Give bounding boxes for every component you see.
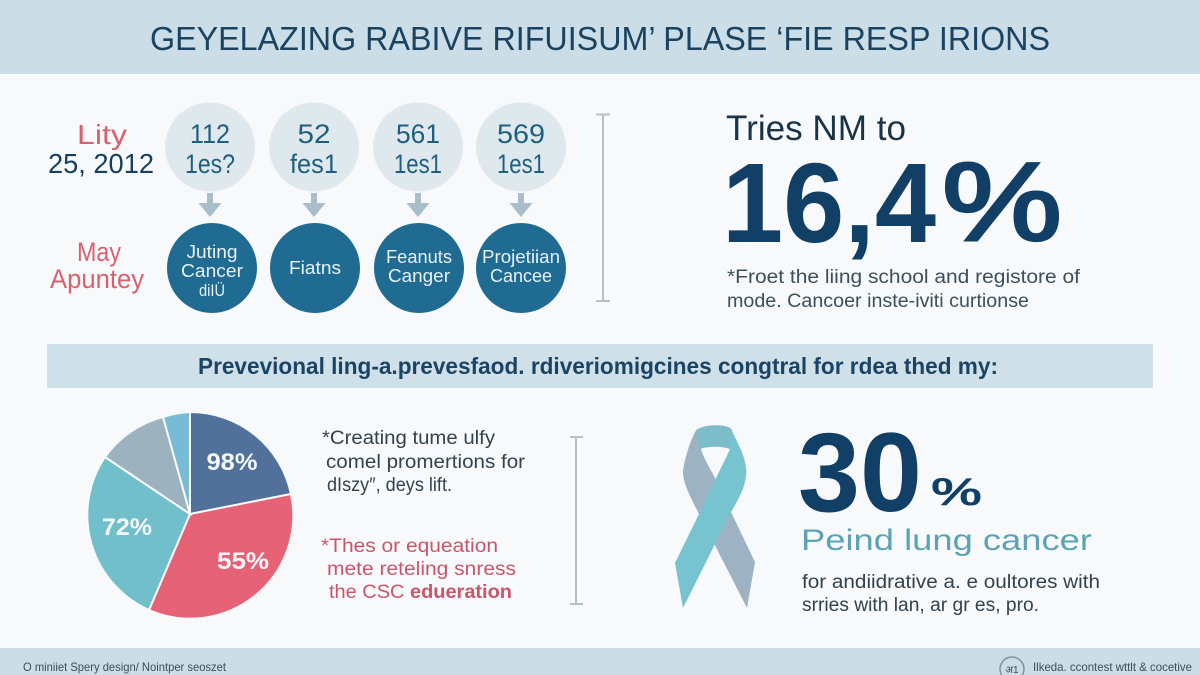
description — [802, 572, 1100, 616]
big number: 16,4 — [722, 140, 936, 266]
stat lead-in: Tries NM to — [726, 109, 906, 148]
row label: May Apuntey: May — [77, 237, 121, 267]
stat circle 3: 1es1 — [394, 149, 442, 179]
pie chart — [87, 412, 293, 619]
footer note: O miniiet Spery design/ Nointper seoszet — [23, 660, 227, 674]
footer icon — [1000, 657, 1024, 675]
pie labels — [102, 449, 269, 575]
stat circle 4 — [476, 102, 566, 192]
text block: dark note: *Creating tume ulfy — [322, 428, 496, 449]
footer bar — [0, 648, 1200, 675]
slice: grey — [105, 417, 190, 514]
cancer circle 4: Projetiian — [482, 247, 560, 267]
cancer circle 2: Fiatns — [289, 258, 341, 278]
cancer circle 1: diIÜ — [199, 281, 225, 300]
cancer circle 1 — [167, 223, 257, 313]
footer credit: Ilkeda. ccontest wttlt & cocetive — [1033, 660, 1192, 674]
stat note: *Froet the liing school and registore of — [727, 267, 1081, 288]
pie labels: 98% — [206, 449, 258, 476]
stat circle 1 — [165, 102, 255, 192]
stat circle 1: 1es? — [185, 149, 235, 179]
cancer circle 4: Cancee — [490, 266, 552, 286]
stat circle 2: 52 — [298, 119, 330, 149]
text block: red note: *Thes or equeation — [321, 536, 498, 557]
stat note: mode. Cancoer inste-iviti curtionse — [727, 291, 1029, 312]
arrow 3 — [406, 193, 430, 217]
text block: dark note: dIszy″, deys lift. — [327, 475, 452, 496]
stat circle 3: 561 — [396, 119, 440, 149]
row label: May Apuntey — [50, 237, 144, 294]
cancer circle 3 — [374, 223, 464, 313]
cancer circle 2 — [270, 223, 360, 313]
text block: dark note — [322, 428, 526, 496]
subheading: Peind lung cancer — [801, 524, 1092, 557]
big number: % — [942, 140, 1062, 264]
stat circle 3 — [373, 102, 463, 192]
percent sign: % — [931, 471, 982, 514]
big number — [722, 140, 1062, 266]
cancer circle 3: Canger — [388, 266, 450, 286]
icon: awareness ribbon — [675, 425, 755, 608]
description: for andiidrative a. e oultores with — [802, 572, 1100, 593]
slice: 55% — [149, 494, 293, 619]
cancer circle 4 — [476, 223, 566, 313]
panel: 30% statistic — [798, 410, 1100, 616]
stat circle 2 — [269, 102, 359, 192]
slice: light blue — [163, 412, 190, 514]
section banner: Prevevional ling-a.prevesfaod. rdiveriomigcines congtral for rdea thed my: — [198, 353, 998, 379]
panel: timeline circles — [48, 102, 566, 313]
text block: dark note: comel promertions for — [326, 452, 526, 473]
text block: red note — [321, 536, 516, 603]
row label: May Apuntey: Apuntey — [50, 264, 144, 294]
cancer circle 1: Juting — [186, 242, 238, 262]
stat circle 4: 1es1 — [497, 149, 545, 179]
row label: Lity 25, 2012 — [48, 119, 154, 179]
stat note — [727, 267, 1081, 312]
arrow 1 — [198, 193, 222, 217]
text block: red note: mete reteling snress — [327, 559, 516, 580]
panel: headline statistic — [722, 109, 1081, 312]
description: srries with lan, ar gr es, pro. — [802, 595, 1039, 616]
text block: red note: the CSC edueration — [329, 582, 512, 603]
row label: Lity 25, 2012: Lity — [77, 119, 127, 150]
pie labels: 55% — [217, 548, 269, 575]
stat circle 4: 569 — [497, 119, 545, 149]
cancer circle 3: Feanuts — [386, 247, 452, 267]
stat circle 1: 112 — [190, 119, 230, 149]
slice: 72% — [87, 457, 190, 610]
title banner: GEYELAZING RABIVE RIFUISUM’ PLASE ‘FIE RESP IRIONS — [150, 20, 1050, 57]
arrow 2 — [302, 193, 326, 217]
arrow 4 — [510, 193, 532, 217]
big number: 30 — [798, 410, 922, 535]
title banner — [0, 0, 1200, 74]
row label: Lity 25, 2012: 25, 2012 — [48, 148, 154, 179]
cancer circle 1: Cancer — [181, 261, 243, 281]
slice: 98% — [190, 412, 291, 514]
stat circle 2: fes1 — [290, 149, 338, 179]
pie labels: 72% — [102, 514, 152, 541]
section banner — [47, 344, 1153, 388]
